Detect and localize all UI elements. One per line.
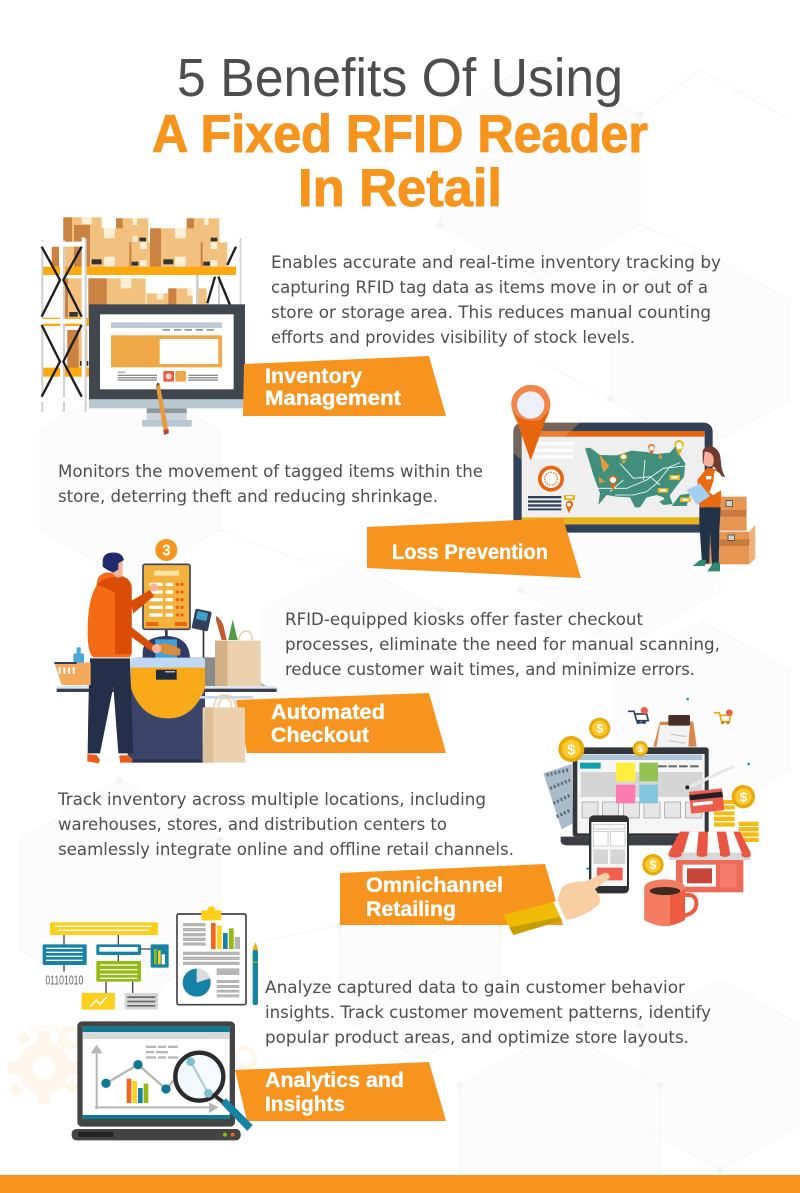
- text block: [58, 462, 483, 506]
- icon: map screen, pin and woman with boxes: [511, 385, 755, 571]
- text block: Enables accurate and real-time inventory tracking by: [271, 253, 721, 272]
- icon: flowchart, report and laptop chart with magnifier: 01101010: [45, 972, 83, 987]
- icon: laptop, phone, store, coins and coffee: $: [638, 744, 644, 754]
- icon: laptop, phone, store, coins and coffee: [503, 698, 759, 935]
- icon: flowchart, report and laptop chart with magnifier: [43, 906, 258, 1140]
- panel: omnichannel retailing: [57, 698, 759, 935]
- ribbon label: Checkout: [271, 724, 369, 747]
- coffee mug: [675, 895, 696, 916]
- paper bags: [203, 707, 245, 763]
- text block: RFID-equipped kiosks offer faster checkout: [285, 610, 644, 629]
- text block: efforts and provides visibility of stock levels.: [271, 328, 635, 347]
- text block: processes, eliminate the need for manual scanning,: [285, 635, 720, 654]
- woman: [703, 446, 725, 477]
- text block: seamlessly integrate online and offline retail channels.: [58, 840, 514, 859]
- text block: [285, 610, 720, 679]
- icon: laptop, phone, store, coins and coffee: $: [567, 742, 575, 758]
- icon: laptop, phone, store, coins and coffee: $: [596, 722, 603, 736]
- icon: warehouse shelves and monitor: [38, 217, 245, 435]
- text block: insights. Track customer movement patterns, identify: [265, 1003, 711, 1022]
- panel: loss prevention: [58, 385, 755, 578]
- title: 5 Benefits Of Using: [177, 48, 623, 108]
- ribbon label: [236, 693, 446, 753]
- decorative ghost gears and binary: 01010100: [29, 1024, 69, 1034]
- text block: capturing RFID tag data as items move in or out of a: [271, 278, 708, 297]
- ribbon label: Inventory: [265, 365, 362, 388]
- customer: [88, 658, 133, 753]
- text block: Monitors the movement of tagged items within the: [58, 462, 483, 481]
- ribbon label: Omnichannel: [366, 874, 503, 897]
- ribbon label: [235, 1062, 446, 1121]
- ribbon label: [367, 518, 581, 578]
- icon: laptop, phone, store, coins and coffee: $: [650, 858, 657, 872]
- bread: [154, 644, 181, 656]
- store: [676, 855, 743, 892]
- text block: warehouses, stores, and distribution centers to: [58, 815, 447, 834]
- ribbon label: [243, 356, 446, 416]
- carts: [628, 711, 648, 723]
- ribbon label: Analytics and: [265, 1069, 404, 1092]
- ribbon label: Automated: [271, 701, 385, 724]
- ribbon label: Insights: [265, 1093, 345, 1116]
- icon: laptop, phone, store, coins and coffee: $: [740, 789, 748, 804]
- ribbon label: Management: [265, 387, 401, 410]
- big pin: [511, 385, 550, 461]
- panel: analytics and insights: [43, 906, 711, 1140]
- ribbon label: Retailing: [366, 898, 456, 921]
- text block: [57, 790, 514, 859]
- footer bar: [0, 1175, 800, 1193]
- panel: inventory management: [38, 217, 721, 435]
- text block: [265, 978, 711, 1047]
- text block: store, deterring theft and reducing shrinkage.: [58, 487, 438, 506]
- icon: customer at self-checkout kiosk: [54, 539, 277, 763]
- text block: Analyze captured data to gain customer behavior: [265, 978, 685, 997]
- ribbon label: [340, 864, 563, 925]
- title: In Retail: [298, 159, 502, 218]
- coins: [558, 718, 755, 875]
- title: A Fixed RFID Reader: [152, 105, 648, 164]
- basket: [73, 653, 84, 664]
- text block: Track inventory across multiple locations, including: [57, 790, 486, 809]
- text block: [271, 253, 721, 347]
- phone: [589, 815, 629, 893]
- shopping bag counter: [216, 616, 227, 640]
- title: [152, 48, 648, 218]
- panel: automated checkout: [54, 539, 720, 763]
- icon: customer at self-checkout kiosk: 3: [162, 542, 171, 559]
- ribbon label: Loss Prevention: [392, 541, 548, 564]
- text block: store or storage area. This reduces manual counting: [271, 303, 711, 322]
- text block: popular product areas, and optimize store layouts.: [265, 1028, 689, 1047]
- decorative ghost gears and binary: [8, 1024, 255, 1104]
- US map: [585, 446, 685, 507]
- boxes: [717, 497, 747, 531]
- hand: [557, 873, 610, 920]
- text block: reduce customer wait times, and minimize errors.: [285, 660, 695, 679]
